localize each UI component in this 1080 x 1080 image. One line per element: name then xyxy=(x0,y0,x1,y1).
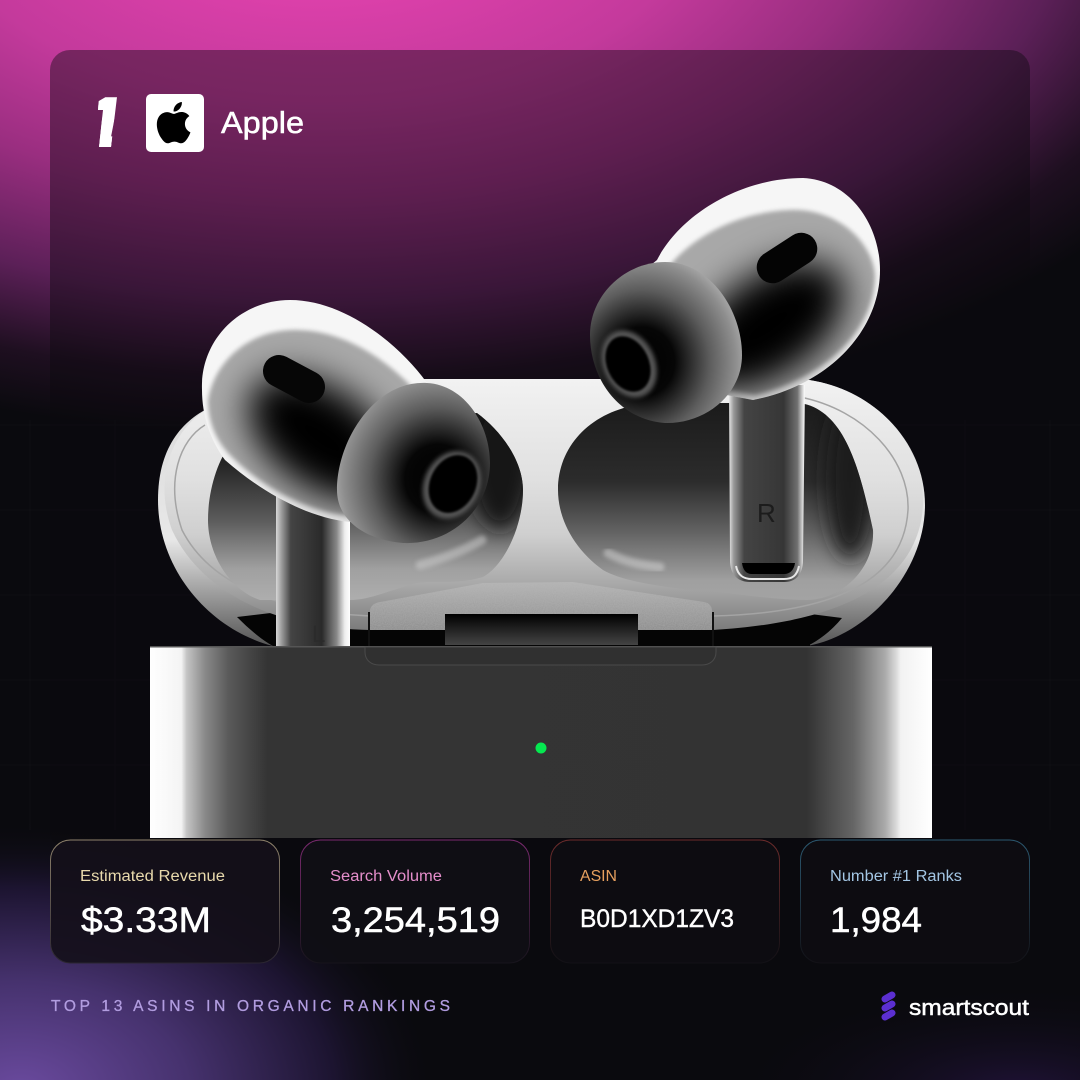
case base xyxy=(150,646,932,838)
right earbud slot xyxy=(751,227,823,289)
brand name: Apple xyxy=(221,105,304,140)
right earbud stem xyxy=(729,385,805,582)
left earbud stem: L xyxy=(312,621,325,648)
left cavity xyxy=(208,413,523,600)
status light xyxy=(536,742,546,754)
stat card: ASIN: B0D1XD1ZV3 xyxy=(580,905,734,933)
rank number: 1 xyxy=(84,86,122,162)
stat card: search volume: 3,254,519 xyxy=(331,901,500,940)
product: AirPods Pro case and earbuds xyxy=(150,170,932,838)
left earbud body xyxy=(202,300,424,522)
icon: smartscout logo xyxy=(885,995,892,1017)
hinge xyxy=(273,582,810,647)
right ear tip xyxy=(590,262,742,423)
stat card: number 1 ranks xyxy=(800,840,1030,963)
stat card: number 1 ranks: Number #1 Ranks xyxy=(830,868,962,885)
stat card: ASIN: ASIN xyxy=(580,868,617,885)
right cavity xyxy=(550,400,880,605)
smartscout wordmark: smartscout xyxy=(909,995,1030,1020)
stat card: search volume: Search Volume xyxy=(330,868,442,885)
stat card: estimated revenue xyxy=(50,840,280,963)
case lid xyxy=(158,379,925,646)
stat card: ASIN xyxy=(550,840,780,963)
panel: main card xyxy=(50,50,1030,850)
right earbud body xyxy=(653,178,880,400)
stat card: search volume xyxy=(300,840,530,963)
right earbud stem: R xyxy=(757,498,776,528)
stat card: estimated revenue: $3.33M xyxy=(81,901,211,940)
left earbud slot xyxy=(257,349,331,409)
stat card: number 1 ranks: 1,984 xyxy=(830,901,922,940)
footer caption: TOP 13 ASINS IN ORGANIC RANKINGS xyxy=(51,998,450,1015)
stat card: estimated revenue: Estimated Revenue xyxy=(80,868,225,885)
icon: Apple logo xyxy=(146,94,204,152)
left earbud stem xyxy=(276,495,350,648)
left ear tip xyxy=(337,383,492,543)
